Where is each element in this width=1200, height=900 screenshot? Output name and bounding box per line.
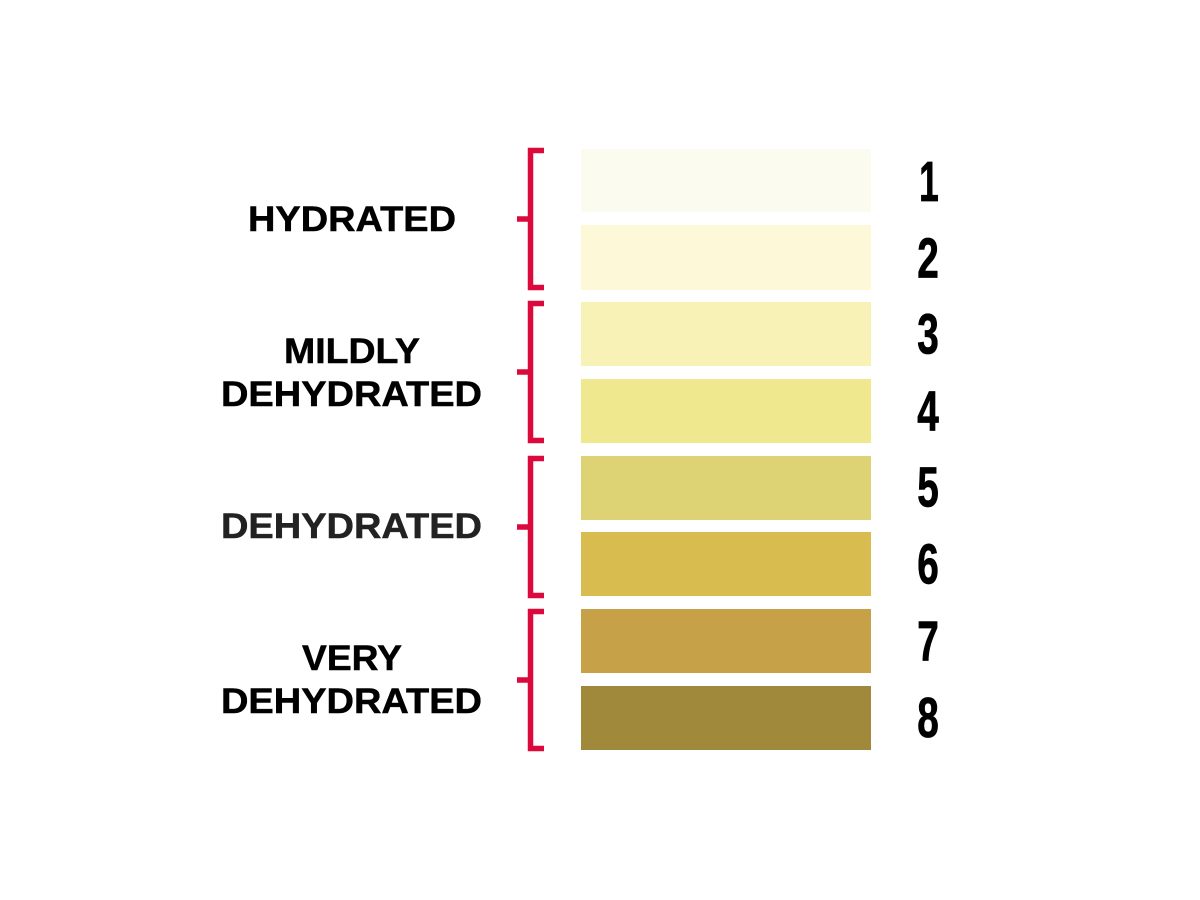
swatch 1 bbox=[581, 149, 871, 212]
number 6: 6 bbox=[917, 533, 939, 596]
swatch 2 bbox=[581, 225, 871, 290]
swatch 8 bbox=[581, 686, 871, 750]
bracket: hydrated bbox=[517, 150, 544, 288]
label: mildly dehydrated: DEHYDRATED bbox=[221, 375, 482, 414]
number 2: 2 bbox=[917, 227, 939, 290]
label: very dehydrated: VERY bbox=[302, 639, 402, 678]
label: dehydrated: DEHYDRATED bbox=[221, 507, 482, 546]
label: mildly dehydrated: MILDLY bbox=[284, 332, 420, 371]
swatch 7 bbox=[581, 609, 871, 673]
number 3: 3 bbox=[917, 303, 939, 366]
number 1: 1 bbox=[919, 151, 939, 214]
number 7: 7 bbox=[917, 610, 939, 673]
bracket: dehydrated bbox=[517, 458, 544, 596]
label: hydrated: HYDRATED bbox=[248, 200, 456, 239]
swatch 3 bbox=[581, 302, 871, 366]
number 8: 8 bbox=[917, 687, 939, 750]
label: very dehydrated bbox=[221, 639, 482, 721]
number 5: 5 bbox=[917, 456, 939, 519]
label: very dehydrated: DEHYDRATED bbox=[221, 682, 482, 721]
swatch 5 bbox=[581, 456, 871, 520]
label: mildly dehydrated bbox=[221, 332, 482, 414]
swatch 6 bbox=[581, 532, 871, 596]
swatch 4 bbox=[581, 379, 871, 443]
bracket: mildly dehydrated bbox=[517, 304, 544, 440]
number 4: 4 bbox=[917, 380, 939, 443]
bracket: very dehydrated bbox=[517, 612, 544, 748]
